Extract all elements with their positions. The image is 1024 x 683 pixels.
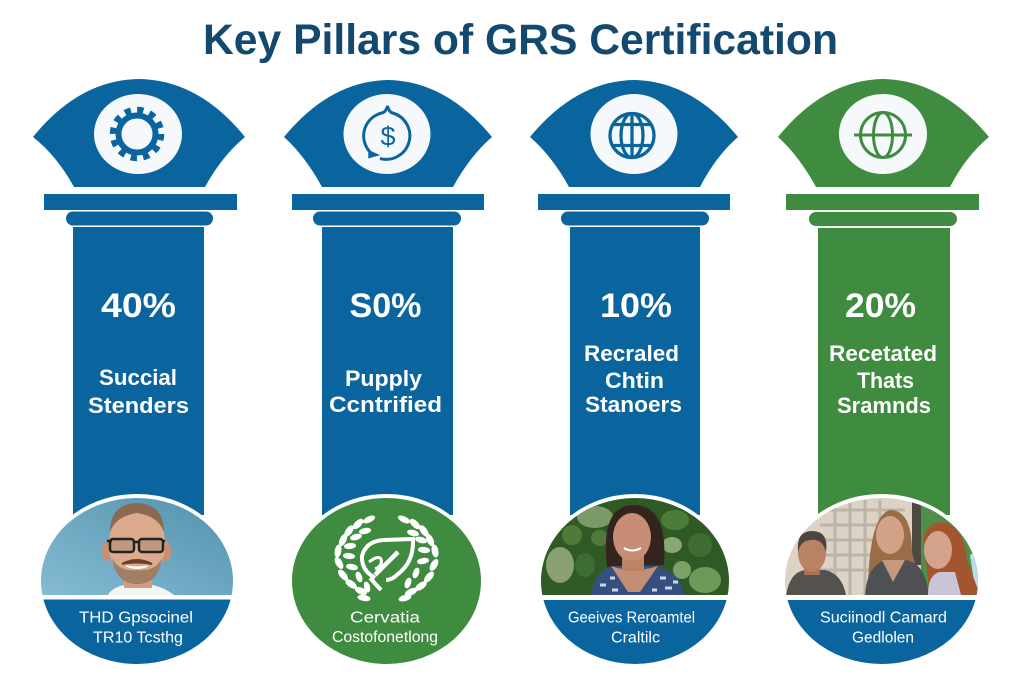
photo: woman among foliage xyxy=(541,498,729,664)
pillar 3 label: Recraled xyxy=(584,341,679,366)
pillar 2 label: Pupply xyxy=(345,366,422,391)
pillar 2 label xyxy=(329,366,442,417)
medallion caption: Costofonetlong xyxy=(332,629,438,646)
medallion caption: THD Gpsocinel xyxy=(79,610,193,626)
medallion caption xyxy=(820,610,947,646)
pillar 1 medallion xyxy=(41,494,233,664)
title: Key Pillars of GRS Certification xyxy=(203,16,838,64)
pillar 3 label xyxy=(584,341,682,417)
medallion caption xyxy=(79,610,193,646)
pillar 4 label: Recetated xyxy=(829,341,937,366)
pillar 4 label: Thats xyxy=(857,368,914,393)
pillar 4 label: Sramnds xyxy=(837,393,931,418)
panel: pillar 2 xyxy=(284,80,492,668)
pillar 2 icon: dollar cycle: $ xyxy=(380,122,396,152)
pillar 3 label: Stanoers xyxy=(585,392,682,417)
pillar 3 medallion xyxy=(541,494,729,664)
pillar 4 medallion xyxy=(785,494,978,664)
medallion caption xyxy=(332,610,438,646)
panel: pillar 3 xyxy=(530,80,740,670)
pillar 3 capital xyxy=(530,80,738,187)
medallion caption: Suciinodl Camard xyxy=(820,610,947,626)
panel: pillar 1 xyxy=(30,79,245,670)
pillar 4 icon: globe xyxy=(839,94,927,174)
panel: pillar 4 xyxy=(778,79,989,670)
pillar 3 shaft xyxy=(570,227,700,515)
photo: group of three people xyxy=(785,498,978,664)
pillar 1 label xyxy=(88,365,189,418)
medallion caption: TR10 Tcsthg xyxy=(93,630,183,646)
pillar 1 icon: gear xyxy=(94,94,182,174)
pillar 1 collar xyxy=(66,212,213,226)
pillar 2 medallion xyxy=(289,494,484,668)
pillar 1 percentage: 40% xyxy=(101,287,176,325)
pillar 2 shaft xyxy=(322,227,453,515)
medallion caption xyxy=(568,610,695,646)
pillar 2 abacus xyxy=(292,194,484,210)
pillar 2 collar xyxy=(313,212,461,226)
pillar 3 collar xyxy=(561,212,709,226)
pillar 3 percentage: 10% xyxy=(600,287,672,325)
medallion caption: Craltilc xyxy=(611,630,660,646)
pillar 1 capital xyxy=(33,79,245,187)
medallion caption: Geeives Reroamtel xyxy=(568,610,695,626)
pillar 4 percentage: 20% xyxy=(845,287,916,325)
pillar 1 label: Succial xyxy=(99,365,177,390)
medallion caption: Gedlolen xyxy=(852,630,914,646)
pillar 2 icon: dollar cycle xyxy=(344,94,430,174)
pillar 1 shaft xyxy=(73,227,204,515)
pillar 3 icon: globe xyxy=(590,94,678,174)
pillar 4 abacus xyxy=(786,194,979,210)
photo: man with glasses xyxy=(41,498,233,664)
pillar 4 shaft xyxy=(818,228,950,515)
pillar 1 abacus xyxy=(44,194,237,210)
pillar 3 abacus xyxy=(538,194,730,210)
pillar 4 label xyxy=(829,341,937,418)
pillar 3 label: Chtin xyxy=(605,368,664,393)
pillar 2 percentage: S0% xyxy=(350,287,422,325)
pillar 4 collar xyxy=(809,212,957,226)
medallion caption: Cervatia xyxy=(350,610,420,626)
pillar 4 capital xyxy=(778,79,989,187)
pillar 2 label: Ccntrified xyxy=(329,392,442,417)
pillar 2 capital xyxy=(284,80,492,187)
icon: laurel wreath with leaf xyxy=(334,515,439,602)
pillar 1 label: Stenders xyxy=(88,393,189,418)
